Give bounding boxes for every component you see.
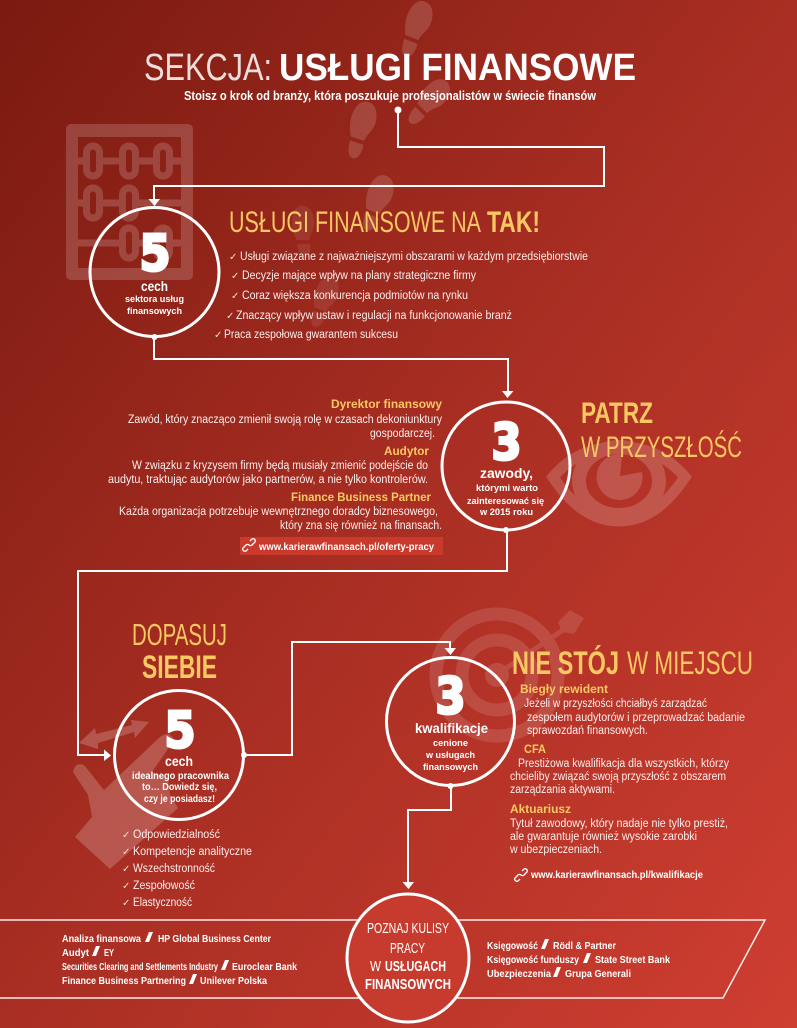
heading: patrz w przyszłość (581, 397, 742, 464)
circle: 3 zawody: którymi warto (476, 483, 538, 494)
text block: kwalifikacje: Tytuł zawodowy, który nadaje nie tylko prestiż, (510, 818, 728, 830)
footer list: right: Grupa Generali (565, 969, 631, 980)
checklist: pracownik: ✓ (122, 830, 130, 841)
circle: 5 cech pracownika: to… Dowiedz się, (142, 782, 217, 793)
circle: 5 cech pracownika: 5 (164, 702, 196, 760)
checklist: sektor: Znaczący wpływ ustaw i regulacji na funkcjonowanie branż (236, 310, 512, 322)
circle: 5 cech pracownika: czy je posiadasz! (144, 794, 215, 805)
title: SEKCJA: (144, 47, 272, 89)
heading: dopasuj siebie: SIEBIE (142, 649, 217, 685)
heading: usługi finansowe na tak: TAK! (487, 206, 540, 239)
circle: poznaj kulisy pracy: POZNAJ KULISY (367, 920, 449, 937)
text block: zawody (108, 397, 442, 532)
checklist: sektor: Decyzje mające wpływ na plany strategiczne firmy (242, 270, 476, 282)
circle: 5 cech pracownika (114, 690, 247, 820)
checklist: sektor: Usługi związane z najważniejszymi obszarami w każdym przedsiębiorstwie (240, 251, 588, 263)
subtitle: Stoisz o krok od branży, która poszukuje profesjonalistów w świecie finansów (184, 88, 597, 103)
footer list: right: Księgowość (487, 941, 538, 952)
link button: oferty pracy: www.karierawfinansach.pl/oferty-pracy (258, 541, 434, 553)
text block: kwalifikacje: Biegły rewident (520, 682, 608, 696)
checklist: sektor: ✓ (231, 291, 239, 302)
circle: 3 kwalifikacje (386, 658, 514, 789)
icon: faint footprints (290, 204, 342, 330)
circle: 5 cech pracownika: idealnego pracownika (132, 771, 229, 782)
text block: kwalifikacje: zarządzania aktywami. (510, 784, 615, 796)
title: USŁUGI FINANSOWE (279, 47, 636, 89)
text block: zawody: Dyrektor finansowy (331, 397, 442, 411)
checklist: pracownik: ✓ (122, 881, 130, 892)
icon: hand with double arrow (73, 720, 178, 869)
circle: poznaj kulisy pracy: W (370, 958, 382, 975)
checklist: sektor: ✓ (226, 311, 234, 322)
footer list: left: Analiza finansowa (62, 934, 141, 945)
checklist: pracownik: Kompetencje analityczne (133, 846, 252, 858)
circle: 3 kwalifikacje: kwalifikacje (415, 720, 488, 736)
footer list: left: HP Global Business Center (158, 934, 271, 945)
circle: 5 cech sektora: cech (141, 278, 168, 294)
heading: dopasuj siebie: DOPASUJ (132, 617, 227, 652)
circle: poznaj kulisy pracy: FINANSOWYCH (365, 976, 451, 993)
text block: zawody: audytu, traktując audytorów jako partnerów, a nie tylko kontrolerów. (108, 474, 428, 486)
text block: kwalifikacje: Jeżeli w przyszłości chciałbyś zarządzać (524, 698, 707, 710)
checklist: pracownik: ✓ (122, 864, 130, 875)
checklist: pracownik: Zespołowość (133, 880, 195, 892)
circle: 5 cech sektora: 5 (140, 224, 170, 282)
text block: zawody: gospodarczej. (370, 428, 435, 440)
text block: zawody: Każda organizacja potrzebuje wewnętrznego doradcy biznesowego, (119, 506, 438, 518)
circle: poznaj kulisy pracy (347, 894, 469, 1022)
circle: 3 kwalifikacje: w usługach (425, 750, 475, 761)
footer list: left: Audyt (62, 948, 90, 959)
circle: 5 cech sektora: sektora usług (125, 294, 184, 305)
footer list: left: Euroclear Bank (232, 962, 297, 973)
circle: 3 zawody (442, 402, 570, 533)
footer list: right: Ubezpieczenia (487, 969, 551, 980)
heading: usługi finansowe na tak: USŁUGI FINANSOWE NA (229, 206, 481, 239)
checklist: pracownik: Wszechstronność (133, 863, 215, 875)
text block: kwalifikacje: CFA (524, 742, 546, 756)
footer list: left: Finance Business Partnering (62, 976, 186, 987)
footer band (0, 920, 765, 998)
circle: 5 cech sektora: finansowych (127, 306, 182, 317)
circle: 5 cech pracownika: cech (165, 753, 193, 769)
heading: nie stój w miejscu (512, 645, 753, 681)
footer list: right: State Street Bank (595, 955, 670, 966)
circle: 3 zawody: zainteresować się (467, 496, 544, 507)
text block: zawody: Zawód, który znacząco zmienił swoją rolę w czasach dekoniunktury (128, 414, 442, 426)
checklist: pracownik: Odpowiedzialność (133, 829, 220, 841)
circle: 3 zawody: zawody, (480, 465, 533, 481)
text block: kwalifikacje (509, 682, 745, 856)
circle: poznaj kulisy pracy: PRACY (390, 940, 425, 957)
heading: patrz w przyszłość: PATRZ (581, 397, 653, 430)
text block: kwalifikacje: Prestiżowa kwalifikacja dla wszystkich, którzy (518, 758, 729, 770)
footer list: left: EY (104, 948, 114, 959)
footer list: right: Rödl & Partner (553, 941, 616, 952)
checklist: sektor: Coraz większa konkurencja podmiotów na rynku (242, 290, 468, 302)
footer list: left: Securities Clearing and Settlements Industry (62, 962, 218, 973)
checklist: pracownik (122, 829, 252, 909)
text block: kwalifikacje: chcieliby związać swoją przyszłość z obszarem (510, 771, 726, 783)
icon: footprints (344, 0, 455, 235)
text block: kwalifikacje: zespołem audytorów i przeprowadzać badanie (527, 712, 745, 724)
circle: poznaj kulisy pracy: USŁUGACH (385, 958, 446, 975)
text block: kwalifikacje: w ubezpieczeniach. (509, 844, 602, 856)
checklist: pracownik: Elastyczność (133, 897, 192, 909)
title (144, 47, 636, 89)
icon: target with arrow (436, 610, 584, 736)
checklist: pracownik: ✓ (122, 898, 130, 909)
checklist: sektor: ✓ (214, 330, 222, 341)
text block: zawody: który zna się również na finansach. (280, 520, 442, 532)
checklist: pracownik: ✓ (122, 847, 130, 858)
link button: oferty pracy (240, 537, 443, 555)
text block: zawody: Finance Business Partner (291, 490, 431, 504)
circle: 5 cech sektora (90, 208, 219, 340)
circle: 3 kwalifikacje: 3 (436, 668, 466, 726)
text block: zawody: Audytor (384, 444, 429, 458)
circle: 3 zawody: w 2015 roku (479, 507, 533, 518)
heading: dopasuj siebie (132, 617, 227, 685)
circle: 3 kwalifikacje: cenione (433, 738, 468, 749)
icon: abacus (66, 124, 193, 280)
footer list: left: Unilever Polska (200, 976, 267, 987)
text block: zawody: W związku z kryzysem firmy będą musiały zmienić podejście do (132, 460, 428, 472)
checklist: sektor (214, 251, 588, 341)
icon: eye (553, 447, 685, 521)
link: kwalifikacje: www.karierawfinansach.pl/kwalifikacje (530, 869, 703, 881)
connector lines (78, 106, 604, 889)
text block: kwalifikacje: sprawozdań finansowych. (527, 725, 648, 737)
circle: 3 zawody: 3 (492, 414, 522, 472)
footer list: right: Księgowość funduszy (487, 955, 579, 966)
footer list: right (487, 939, 670, 980)
text block: kwalifikacje: ale gwarantuje również wysokie zarobki (510, 831, 697, 843)
checklist: sektor: ✓ (231, 271, 239, 282)
circle: 3 kwalifikacje: finansowych (423, 762, 478, 773)
checklist: sektor: Praca zespołowa gwarantem sukcesu (224, 329, 398, 341)
text block: kwalifikacje: Aktuariusz (510, 802, 571, 816)
heading: nie stój w miejscu: NIE STÓJ (512, 645, 619, 681)
footer list: left (62, 932, 297, 987)
checklist: sektor: ✓ (229, 252, 237, 263)
